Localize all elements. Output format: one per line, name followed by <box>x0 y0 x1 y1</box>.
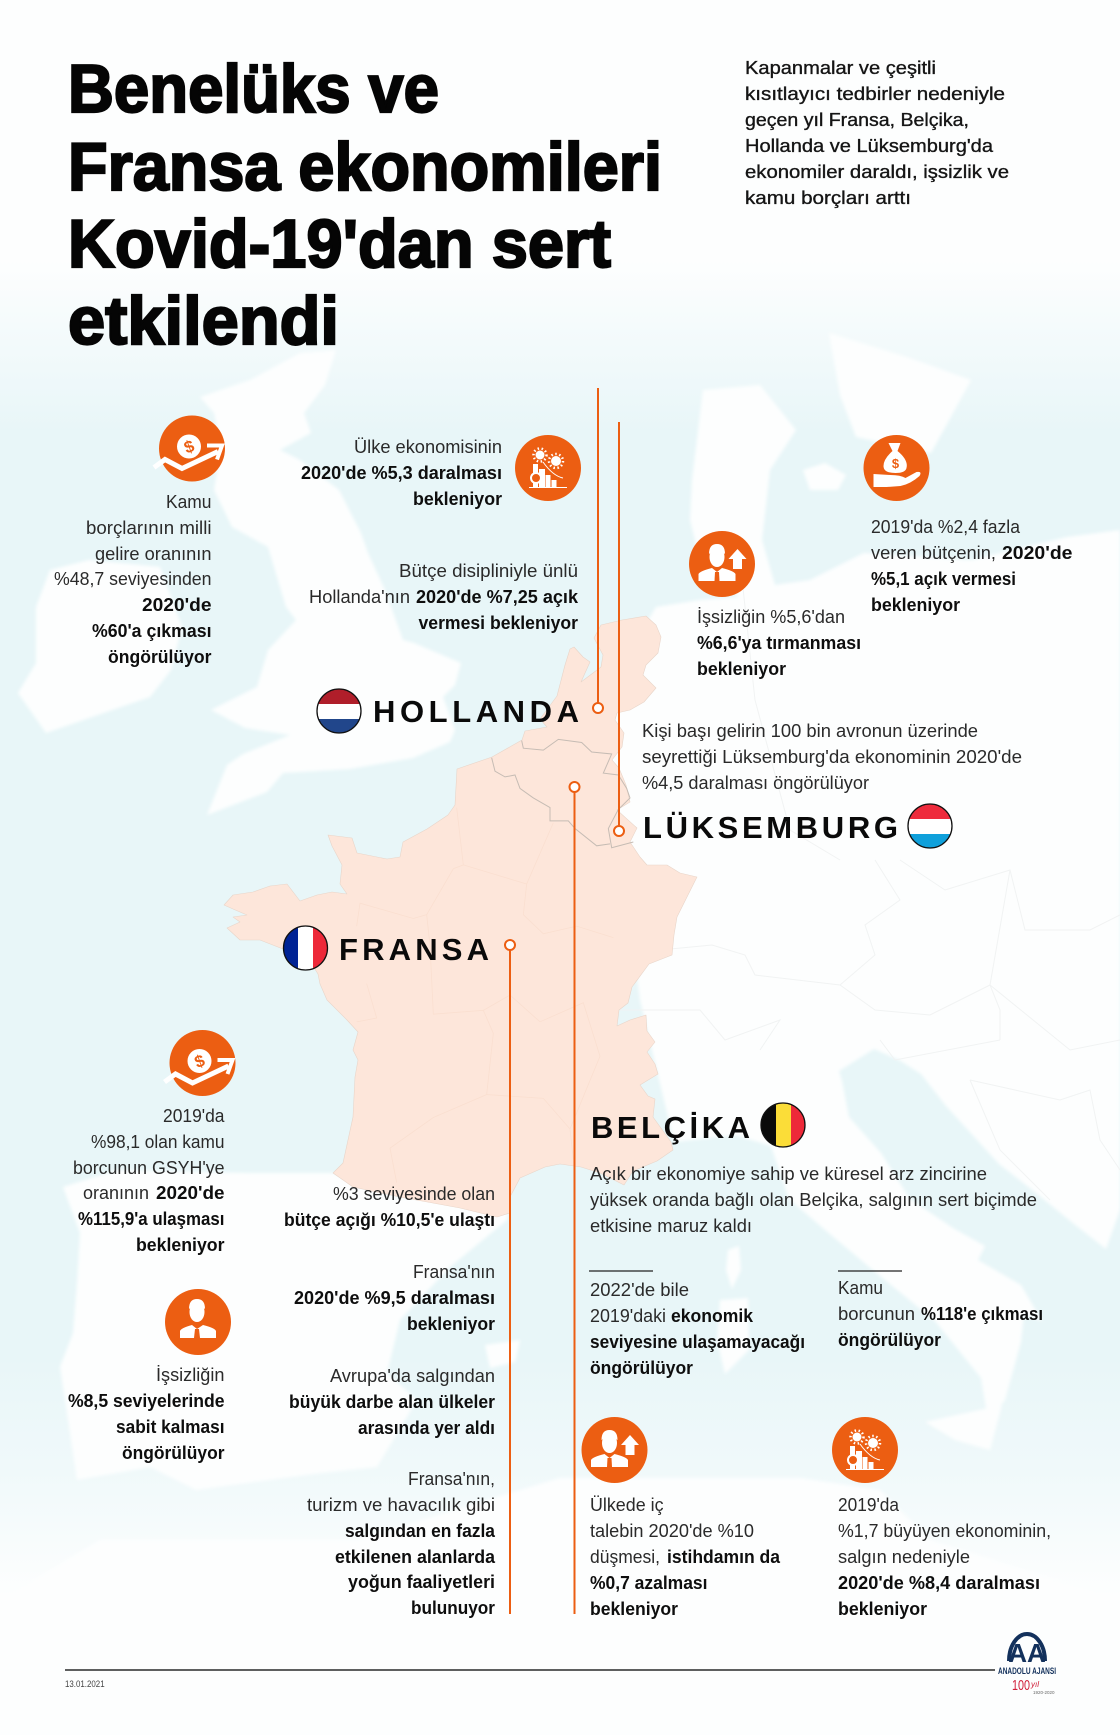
logo: Anadolu Ajansı: AA <box>1008 1638 1046 1668</box>
text: debt to GDP <box>73 1106 225 1255</box>
text: debt to GDP: borcunun GSYH'ye <box>73 1158 224 1178</box>
text: Fransa tourism: yoğun faaliyetleri <box>348 1572 495 1592</box>
text: Fransa budget deficit: %3 seviyesinde olan <box>333 1184 495 1204</box>
connector line: Belçika <box>570 782 580 1614</box>
panel: Belçika recovery: öngörülüyor <box>590 1358 693 1378</box>
heading: Hollanda: HOLLANDA <box>373 694 579 729</box>
panel: Belçika employment <box>582 1417 781 1619</box>
Iberia <box>60 1170 510 1490</box>
title: Kovid-19'dan sert <box>68 206 611 282</box>
text: Fransa tourism: salgından en fazla <box>345 1521 496 1541</box>
text: debt ratio: öngörülüyor <box>108 647 212 667</box>
text: economy contraction: Ülke ekonomisinin <box>354 437 502 457</box>
text: budget surplus: 2019'da %2,4 fazla <box>871 517 1021 537</box>
logo: Anadolu Ajansı: yıl <box>1030 1680 1039 1689</box>
panel: Fransa unemployment <box>68 1289 231 1463</box>
icon: person with up arrow <box>689 531 755 597</box>
icon: Luxembourg flag <box>908 804 952 849</box>
text: unemployment: İşsizliğin %5,6'dan <box>697 607 845 627</box>
text: Fransa contraction <box>294 1262 495 1334</box>
Great Britain <box>200 350 461 815</box>
text: economy contraction: %1,7 büyüyen ekonominin, <box>838 1521 1051 1541</box>
icon: money bag on hand <box>864 435 930 501</box>
title: etkilendi <box>68 283 339 359</box>
heading: Hollanda <box>317 689 579 734</box>
text: Fransa contraction: Fransa'nın <box>413 1262 495 1282</box>
logo: Anadolu Ajansı: ANADOLU AJANSI <box>998 1666 1056 1676</box>
North Africa <box>0 1478 1120 1735</box>
heading: Fransa <box>283 926 489 970</box>
date: 13.01.2021 <box>65 1679 105 1689</box>
panel: Hollanda unemployment <box>689 531 861 679</box>
text: domestic demand: %0,7 azalması <box>590 1573 708 1593</box>
text: Fransa tourism: Fransa'nın, <box>408 1469 495 1489</box>
text: debt ratio: %48,7 seviyesinden <box>54 569 212 589</box>
text: Fransa budget deficit: bütçe açığı %10,5'e ulaştı <box>284 1210 495 1230</box>
text: domestic demand: istihdamın da <box>667 1547 781 1567</box>
text: budget surplus <box>871 517 1072 615</box>
heading: Lüksemburg <box>643 804 952 849</box>
logo: Anadolu Ajansı: 100 <box>1012 1677 1030 1694</box>
text: domestic demand: bekleniyor <box>590 1599 678 1619</box>
text: Fransa tourism: turizm ve havacılık gibi <box>307 1495 495 1515</box>
map: France and Benelux highlighted <box>224 616 697 1217</box>
text: budget surplus: bekleniyor <box>871 595 960 615</box>
icon: France flag <box>283 926 328 970</box>
text: debt to GDP: 2019'da <box>163 1106 225 1126</box>
intro text: kısıtlayıcı tedbirler nedeniyle <box>745 84 1005 104</box>
text: debt ratio: %60'a çıkması <box>92 621 212 641</box>
panel: Belçika recovery <box>589 1271 805 1378</box>
text: economy contraction: salgın nedeniyle <box>838 1547 970 1567</box>
text: domestic demand <box>590 1495 781 1619</box>
text: unemployment <box>68 1365 224 1463</box>
text: debt to GDP: %98,1 olan kamu <box>91 1132 224 1152</box>
text: debt ratio: 2020'de <box>142 595 212 615</box>
text: unemployment <box>697 607 861 679</box>
text: economy contraction: bekleniyor <box>413 489 502 509</box>
text: debt to GDP: bekleniyor <box>136 1235 224 1255</box>
text: debt ratio: gelire oranının <box>95 544 212 564</box>
text: Fransa hit hard <box>289 1366 495 1438</box>
text: domestic demand: düşmesi, <box>590 1547 660 1567</box>
panel: Belçika recovery: 2019'daki <box>590 1306 666 1326</box>
title <box>68 51 662 359</box>
icon: virus and falling bars <box>832 1417 898 1483</box>
text: economy contraction: bekleniyor <box>838 1599 927 1619</box>
text: unemployment: bekleniyor <box>697 659 786 679</box>
icon: money bag on hand: $ <box>892 456 900 471</box>
intro text: geçen yıl Fransa, Belçika, <box>745 110 969 130</box>
icon: rising debt: $ <box>192 1051 208 1072</box>
icon: rising debt: $ <box>181 436 197 458</box>
text: budget surplus: veren bütçenin, <box>871 543 996 563</box>
icon: Netherlands flag <box>317 689 361 734</box>
Sweden and Norway <box>829 333 971 453</box>
text: Lüksemburg description: %4,5 daralması öngörülüyor <box>642 773 869 793</box>
text: Hollanda budget: 2020'de %7,25 açık <box>416 587 579 607</box>
text: Belçika description <box>590 1164 1037 1236</box>
connector line: Lüksemburg <box>614 422 624 836</box>
text: Lüksemburg description: seyrettiği Lüksemburg'da ekonominin 2020'de <box>642 747 1022 767</box>
logo: Anadolu Ajansı: 1920-2020 <box>1033 1690 1055 1695</box>
connector line: Fransa <box>505 940 515 1614</box>
text: debt to GDP: oranının <box>83 1183 149 1203</box>
text: Fransa hit hard: büyük darbe alan ülkeler <box>289 1392 495 1412</box>
heading: Belçika: BELÇİKA <box>591 1110 750 1145</box>
panel: Belçika recovery: seviyesine ulaşamayacağı <box>590 1332 805 1352</box>
panel: Hollanda debt <box>54 416 225 667</box>
Mainland Europe <box>600 385 1120 1420</box>
intro text: ekonomiler daraldı, işsizlik ve <box>745 162 1009 182</box>
panel: Fransa debt <box>73 1030 236 1255</box>
text: economy contraction <box>301 437 502 509</box>
text: unemployment: İşsizliğin <box>156 1365 224 1385</box>
footer rule <box>65 1669 995 1671</box>
panel: Belçika recovery: 2022'de bile <box>590 1280 689 1300</box>
text: debt ratio <box>54 492 212 667</box>
text: budget surplus: 2020'de <box>1002 543 1072 563</box>
text: Fransa hit hard: arasında yer aldı <box>358 1418 495 1438</box>
heading: Fransa: FRANSA <box>339 932 489 967</box>
panel: Belçika debt: Kamu <box>838 1278 883 1298</box>
text: economy contraction: 2020'de %5,3 daralması <box>301 463 502 483</box>
panel: Belçika recovery: ekonomik <box>671 1306 754 1326</box>
panel: Hollanda surplus <box>864 435 1072 615</box>
text: economy contraction: 2020'de %8,4 daralması <box>838 1573 1040 1593</box>
icon: person <box>165 1289 231 1355</box>
text: unemployment: %8,5 seviyelerinde <box>68 1391 224 1411</box>
connector line: Hollanda <box>593 388 603 713</box>
logo: Anadolu Ajansı <box>998 1634 1056 1695</box>
text: debt ratio: borçlarının milli <box>86 518 212 538</box>
text: debt to GDP: %115,9'a ulaşması <box>78 1209 224 1229</box>
icon: person with up arrow <box>582 1417 648 1483</box>
panel: Belçika debt: borcunun <box>838 1304 915 1324</box>
text: Fransa contraction: 2020'de %9,5 daralması <box>294 1288 495 1308</box>
icon: virus and falling bars <box>515 435 581 501</box>
icon: rising debt <box>154 416 225 482</box>
icon: rising debt <box>164 1030 236 1096</box>
heading: Lüksemburg: LÜKSEMBURG <box>643 810 898 845</box>
text: Belçika description: etkisine maruz kaldı <box>590 1216 752 1236</box>
Zealand <box>803 463 846 490</box>
text: Lüksemburg description: Kişi başı gelirin 100 bin avronun üzerinde <box>642 721 978 741</box>
text: Fransa budget deficit <box>284 1184 495 1230</box>
panel: Belçika debt: %118'e çıkması <box>921 1304 1043 1324</box>
text: Fransa tourism <box>307 1469 496 1618</box>
text: Fransa tourism: etkilenen alanlarda <box>335 1547 496 1567</box>
text: Hollanda budget: vermesi bekleniyor <box>418 613 578 633</box>
text: Hollanda budget: Bütçe disipliniyle ünlü <box>399 561 578 581</box>
text: Fransa tourism: bulunuyor <box>411 1598 495 1618</box>
text: Hollanda budget <box>309 561 579 633</box>
text: domestic demand: Ülkede iç <box>590 1495 664 1515</box>
panel: Belçika debt: öngörülüyor <box>838 1330 941 1350</box>
intro text: kamu borçları arttı <box>745 188 911 208</box>
panel: Hollanda economy <box>301 435 581 509</box>
panel: Belçika economy <box>832 1417 1051 1619</box>
Mediterranean islands <box>726 1246 741 1289</box>
Ireland <box>18 560 182 733</box>
text: economy contraction <box>838 1495 1051 1619</box>
text: unemployment: sabit kalması <box>116 1417 224 1437</box>
text: budget surplus: %5,1 açık vermesi <box>871 569 1016 589</box>
text: Lüksemburg description <box>642 721 1022 793</box>
text: unemployment: öngörülüyor <box>122 1443 224 1463</box>
intro text <box>745 58 1009 208</box>
icon: Belgium flag <box>761 1103 806 1147</box>
panel: Belçika debt <box>838 1271 1043 1350</box>
text: debt ratio: Kamu <box>166 492 212 512</box>
intro text: Kapanmalar ve çeşitli <box>745 58 936 78</box>
text: Fransa hit hard: Avrupa'da salgından <box>330 1366 495 1386</box>
intro text: Hollanda ve Lüksemburg'da <box>745 136 994 156</box>
text: Fransa contraction: bekleniyor <box>407 1314 495 1334</box>
text: Belçika description: Açık bir ekonomiye sahip ve küresel arz zincirine <box>590 1164 987 1184</box>
text: Belçika description: yüksek oranda bağlı olan Belçika, salgının sert biçimde <box>590 1190 1037 1210</box>
text: debt to GDP: 2020'de <box>156 1183 224 1203</box>
heading: Belçika <box>591 1103 806 1147</box>
text: unemployment: %6,6'ya tırmanması <box>697 633 861 653</box>
text: domestic demand: talebin 2020'de %10 <box>590 1521 754 1541</box>
text: Hollanda budget: Hollanda'nın <box>309 587 410 607</box>
title: Fransa ekonomileri <box>68 129 662 205</box>
title: Benelüks ve <box>68 51 439 127</box>
text: economy contraction: 2019'da <box>838 1495 900 1515</box>
